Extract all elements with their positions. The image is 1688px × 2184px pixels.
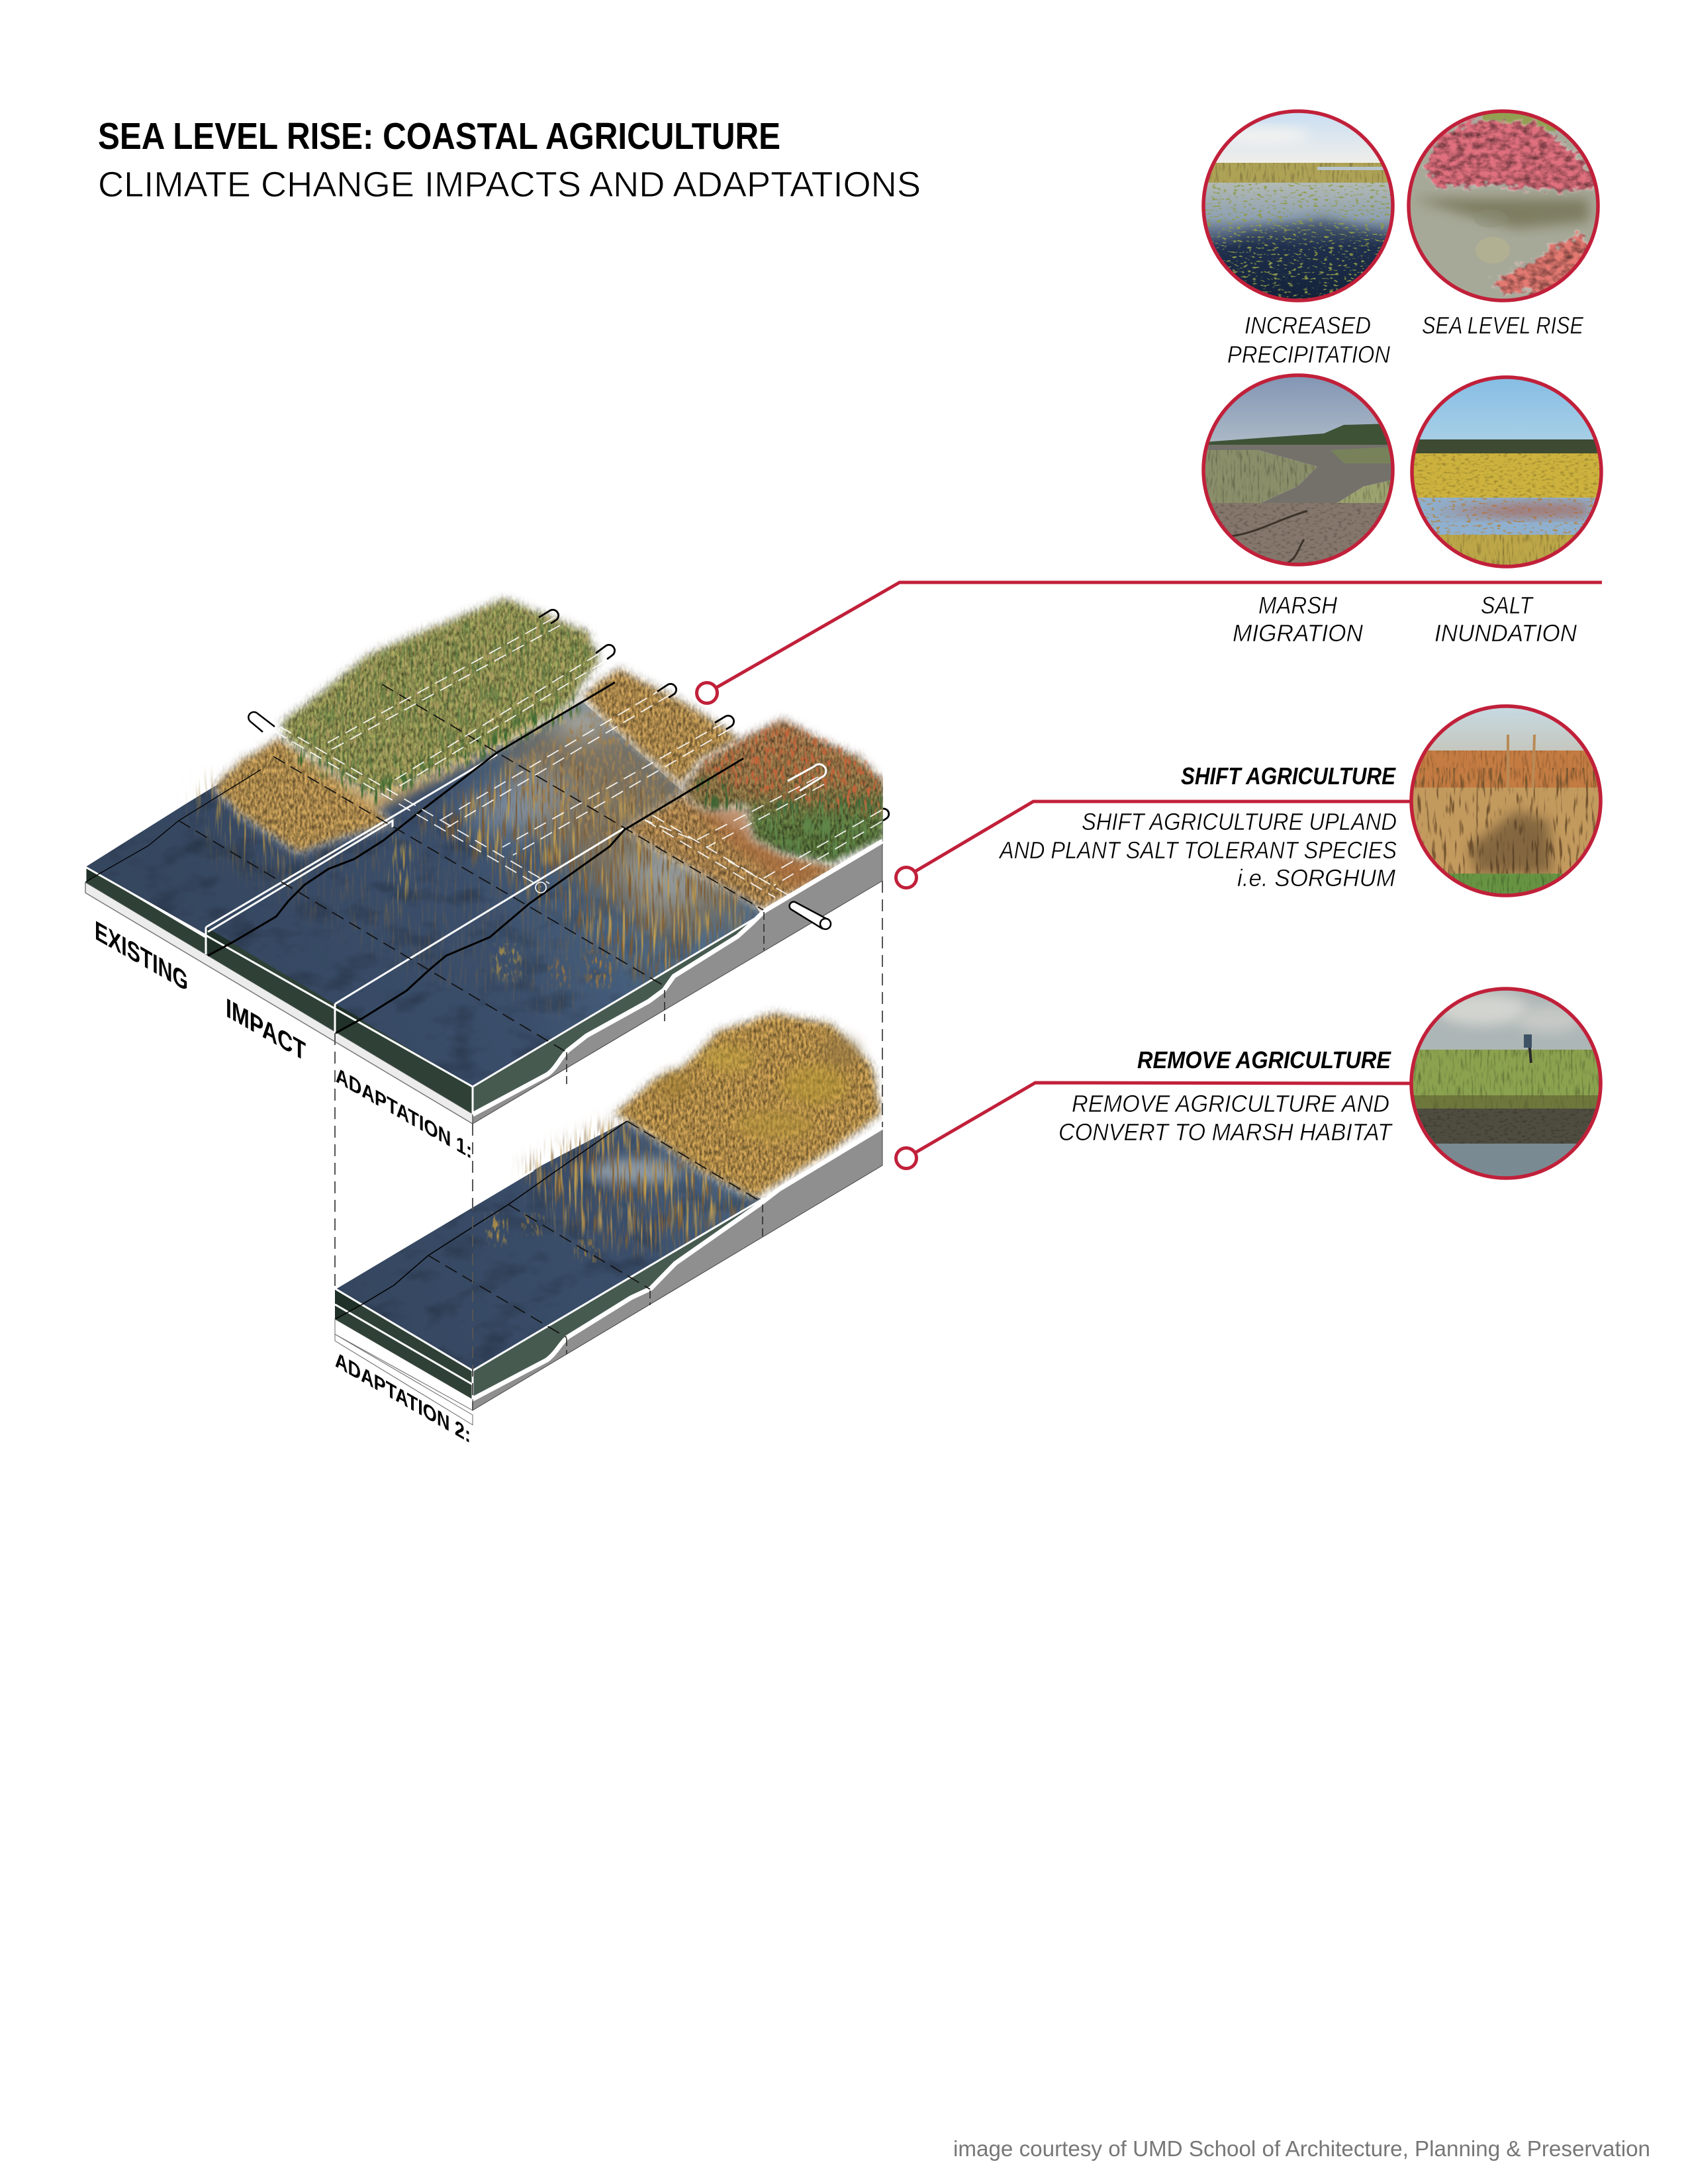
title: SEA LEVEL RISE: COASTAL AGRICULTURE xyxy=(98,115,780,158)
white ground profile xyxy=(473,841,882,1115)
photo caption: increased precipitation: PRECIPITATION xyxy=(1227,341,1391,368)
callout line: remove agriculture xyxy=(896,1083,1413,1169)
callout line: shift agriculture xyxy=(896,801,1413,888)
white ground profile xyxy=(473,1127,882,1399)
text block: remove agriculture description xyxy=(1058,1090,1393,1146)
text block: remove agriculture description: REMOVE AGRICULTURE AND xyxy=(1072,1090,1389,1117)
front face bands xyxy=(335,1319,473,1410)
vegetation: upper slab xyxy=(189,597,887,1019)
photo: sea level rise xyxy=(1409,111,1598,300)
photo caption: marsh migration: MIGRATION xyxy=(1233,619,1364,647)
front soil face xyxy=(335,1289,473,1399)
pipe outlet small circle xyxy=(536,882,546,893)
label: existing: EXISTING xyxy=(95,915,188,998)
photo caption: marsh migration xyxy=(1233,592,1364,647)
water surface xyxy=(85,702,761,1087)
tan marsh: impact section xyxy=(581,666,745,786)
text block: shift agriculture description: AND PLANT SALT TOLERANT SPECIES xyxy=(998,837,1397,864)
label: impact: IMPACT xyxy=(226,993,306,1068)
photo caption: increased precipitation xyxy=(1227,312,1391,368)
text block: shift agriculture description: SHIFT AGRICULTURE UPLAND xyxy=(1082,808,1397,835)
photo: sorghum xyxy=(1411,705,1601,897)
photo caption: salt inundation: INUNDATION xyxy=(1434,619,1577,647)
label: adaptation 2: ADAPTATION 2: xyxy=(335,1347,471,1448)
photo: salt inundation xyxy=(1411,377,1602,568)
cropland ground xyxy=(294,717,551,816)
photo caption: salt inundation xyxy=(1434,592,1577,647)
dark corner triangle xyxy=(335,1289,362,1319)
label base lines xyxy=(335,1334,473,1425)
photo caption: increased precipitation: INCREASED xyxy=(1244,312,1371,339)
sorghum field xyxy=(684,717,887,864)
cornfield xyxy=(280,597,601,797)
pipe: white capsule in sorghum xyxy=(788,764,826,791)
sparse faint reeds over all water xyxy=(216,798,606,1018)
white dashed drain tile network xyxy=(275,617,882,897)
photo caption: sea level rise: SEA LEVEL RISE xyxy=(1422,312,1584,339)
brown haze beneath reeds xyxy=(510,702,748,940)
pipe stub: left xyxy=(248,712,275,732)
white slab edges xyxy=(335,1170,765,1399)
callout line: climate stressors xyxy=(696,582,1602,703)
pipe end caps xyxy=(539,610,889,821)
tan marsh xyxy=(611,1011,883,1200)
reeds xyxy=(523,1118,757,1251)
image credit: image courtesy of UMD School of Architecture, Planning & Preservation xyxy=(953,2136,1650,2161)
tan marsh: adaptation section xyxy=(624,791,854,911)
water surface xyxy=(335,1120,761,1371)
front soil face: impact and adaptation xyxy=(206,927,473,1114)
photo: increased precipitation xyxy=(1203,111,1393,300)
photo caption: salt inundation: SALT xyxy=(1481,592,1534,619)
grey wall dashed ticks xyxy=(567,912,764,1085)
light band under upper slab xyxy=(85,882,473,1124)
label: adaptation 1: ADAPTATION 1: xyxy=(336,1063,472,1164)
black dashed contour lines xyxy=(179,684,763,1051)
dark corner triangles xyxy=(85,868,362,1033)
sky reflections xyxy=(457,708,722,913)
photo: marsh habitat xyxy=(1411,989,1601,1179)
text block: remove agriculture description: CONVERT TO MARSH HABITAT xyxy=(1058,1118,1393,1146)
subtitle: CLIMATE CHANGE IMPACTS AND ADAPTATIONS xyxy=(98,165,921,205)
side wall grey base xyxy=(473,841,882,1124)
black water line curves xyxy=(85,682,743,1033)
vegetation: lower slab xyxy=(487,1011,883,1261)
reeds over water xyxy=(417,748,761,986)
black water line curve xyxy=(336,1121,627,1319)
photo caption: marsh migration: MARSH xyxy=(1258,592,1338,619)
photo: marsh migration xyxy=(1203,375,1393,566)
side wall soil xyxy=(473,1193,771,1399)
side wall grey base xyxy=(473,1127,882,1410)
tan marsh: existing section xyxy=(212,736,392,854)
panel: upper isometric slab with existing, impact and adaptation 1 xyxy=(85,597,889,1124)
heading: shift agriculture: SHIFT AGRICULTURE xyxy=(1181,762,1396,790)
black dashed contour lines xyxy=(428,1121,761,1338)
grey wall dashed ticks xyxy=(567,1205,763,1354)
white slab edges xyxy=(85,754,755,1114)
panel: lower isometric slab with adaptation 2 xyxy=(335,1011,883,1425)
pipe outlet on wall xyxy=(790,902,831,929)
heading: remove agriculture: REMOVE AGRICULTURE xyxy=(1137,1046,1391,1073)
reflection xyxy=(589,1158,682,1185)
front soil face: existing xyxy=(85,867,206,954)
vertical dashed projection lines xyxy=(335,881,882,1410)
side wall soil xyxy=(473,919,755,1115)
text block: shift agriculture description: i.e. SORGHUM xyxy=(1237,864,1395,891)
text block: shift agriculture description xyxy=(998,808,1397,891)
